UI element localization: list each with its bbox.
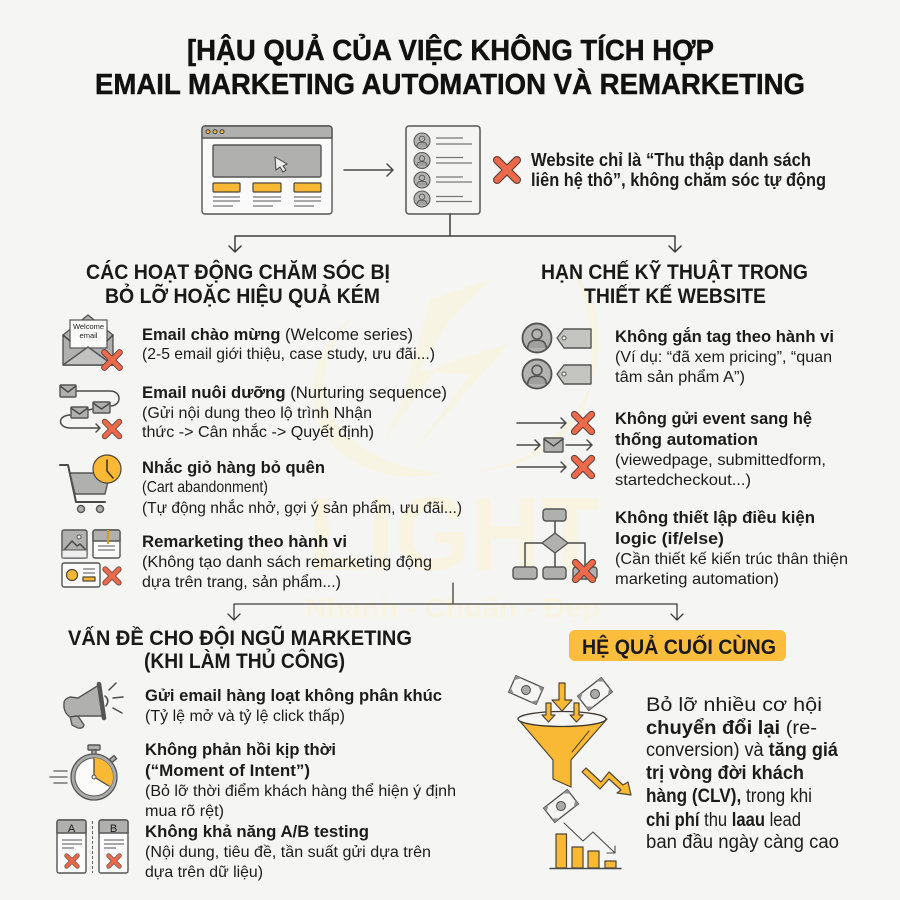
text: no events to automation <box>615 410 826 489</box>
icon: blocked events <box>517 414 592 476</box>
icon: A/B testing: B <box>110 823 117 835</box>
text: no A/B testing: Không khả năng A/B testing <box>145 823 369 841</box>
text: nurturing sequence: Email nuôi dưỡng (Nurturing sequence) <box>142 384 447 402</box>
text: nurturing sequence: (Gửi nội dung theo lộ trình Nhận <box>142 405 372 422</box>
icon: logic flowchart <box>513 509 597 580</box>
heading: technical limitations: HẠN CHẾ KỸ THUẬT TRONG <box>541 260 808 284</box>
icon: stopwatch <box>50 745 117 800</box>
text: no A/B testing <box>145 823 431 881</box>
title: [HẬU QUẢ CỦA VIỆC KHÔNG TÍCH HỢP <box>187 33 714 67</box>
text: no events to automation: Không gửi event sang hệ <box>615 410 812 428</box>
icon: welcome email: Welcome <box>73 322 104 331</box>
text: cart abandonment <box>142 458 462 517</box>
text: no events to automation: thống automation <box>615 431 758 449</box>
callout: website only collects contacts: Website chỉ là “Thu thập danh sách <box>531 150 811 170</box>
icon: megaphone <box>64 683 123 728</box>
text: no if/else logic <box>615 509 848 588</box>
callout: website only collects contacts <box>531 150 826 190</box>
icon: contact list <box>406 126 480 214</box>
text: welcome email: Email chào mừng (Welcome series) <box>142 326 413 344</box>
icon: A/B testing: A <box>68 823 76 835</box>
text: welcome email <box>142 326 435 363</box>
icon: nurturing sequence <box>60 385 119 436</box>
text: welcome email: (2-5 email giới thiệu, case study, ưu đãi...) <box>142 346 435 363</box>
text: final consequence paragraph: trị vòng đời khách <box>646 763 804 784</box>
heading: marketing team problems: (KHI LÀM THỦ CÔNG) <box>144 649 345 673</box>
text: no A/B testing: dựa trên dữ liệu) <box>145 864 263 881</box>
text: no if/else logic: marketing automation) <box>615 571 779 588</box>
text: unsegmented bulk email: (Tỷ lệ mở và tỷ lệ click thấp) <box>145 708 345 725</box>
arrow: lower connector <box>228 583 683 620</box>
text: final consequence paragraph: Bỏ lỡ nhiều cơ hội <box>646 695 822 716</box>
text: no timely response <box>145 741 456 820</box>
text: no timely response: Không phản hồi kịp thời <box>145 741 336 759</box>
icon: conversion funnel <box>509 676 631 868</box>
text: no behaviour tags: Không gắn tag theo hành vi <box>615 327 834 346</box>
text: no timely response: mua rõ rệt) <box>145 803 224 820</box>
text: behaviour remarketing: Remarketing theo hành vi <box>142 533 347 551</box>
heading: missed nurturing activities <box>86 260 390 308</box>
heading: technical limitations: THIẾT KẾ WEBSITE <box>584 285 766 308</box>
text: no events to automation: (viewedpage, submittedform, <box>615 452 826 469</box>
watermark logo: LIGHT <box>308 476 600 593</box>
icon: abandoned cart <box>60 455 121 512</box>
text: behaviour remarketing <box>142 533 432 591</box>
heading: missed nurturing activities: BỎ LỠ HOẶC HIỆU QUẢ KÉM <box>105 284 380 308</box>
icon: A/B testing <box>57 820 128 873</box>
arrow: top connector <box>229 214 681 252</box>
text: unsegmented bulk email <box>145 687 442 725</box>
arrow: website to list <box>344 164 393 176</box>
heading: missed nurturing activities: CÁC HOẠT ĐỘNG CHĂM SÓC BỊ <box>86 260 390 284</box>
text: no A/B testing: (Nội dung, tiêu đề, tần suất gửi dựa trên <box>145 844 431 861</box>
text: final consequence paragraph: conversion) và tăng giá <box>646 740 838 761</box>
text: cart abandonment: (Tự động nhắc nhở, gợi ý sản phẩm, ưu đãi...) <box>142 498 462 517</box>
icon: behaviour remarketing <box>62 530 120 587</box>
text: final consequence paragraph <box>646 695 839 853</box>
text: unsegmented bulk email: Gửi email hàng loạt không phân khúc <box>145 687 442 705</box>
text: behaviour remarketing: dựa trên trang, sản phẩm...) <box>142 573 341 591</box>
text: final consequence paragraph: hàng (CLV), trong khi <box>646 786 812 807</box>
heading: marketing team problems: VẤN ĐỀ CHO ĐỘI NGŨ MARKETING <box>68 626 412 650</box>
text: cart abandonment: Nhắc giỏ hàng bỏ quên <box>142 458 325 477</box>
text: final consequence paragraph: ban đầu ngày càng cao <box>646 832 839 853</box>
icon: red cross <box>497 160 517 180</box>
heading badge: final consequence <box>569 630 786 661</box>
heading: marketing team problems <box>68 626 412 673</box>
text: cart abandonment: (Cart abandonment) <box>142 479 268 496</box>
text: no behaviour tags <box>615 327 834 386</box>
text: no if/else logic: Không thiết lập điều kiện <box>615 509 815 527</box>
text: no if/else logic: (Cần thiết kế kiến trúc thân thiện <box>615 551 848 568</box>
icon: welcome email: email <box>80 331 98 340</box>
text: no timely response: (Bỏ lỡ thời điểm khách hàng thể hiện ý định <box>145 782 456 800</box>
text: final consequence paragraph: chi phí thu laau lead <box>646 810 801 831</box>
text: no behaviour tags: tâm sản phẩm A”) <box>615 368 745 386</box>
title <box>95 33 805 101</box>
watermark logo: Nhanh - Chuẩn - Đẹp <box>305 593 600 623</box>
text: nurturing sequence: thức -> Cân nhắc -> Quyết định) <box>142 422 374 441</box>
text: final consequence paragraph: chuyển đổi lại (re- <box>646 718 817 739</box>
callout: website only collects contacts: liên hệ thô”, không chăm sóc tự động <box>531 170 826 190</box>
text: no timely response: (“Moment of Intent”) <box>145 762 310 780</box>
heading badge: final consequence: HỆ QUẢ CUỐI CÙNG <box>582 635 776 659</box>
text: no behaviour tags: (Ví dụ: “đã xem pricing”, “quan <box>615 349 832 366</box>
icon: user tags <box>522 324 591 388</box>
text: nurturing sequence <box>142 384 447 441</box>
icon: website browser window <box>202 126 332 214</box>
icon: welcome email <box>63 315 120 368</box>
watermark logo <box>305 270 600 623</box>
text: no if/else logic: logic (if/else) <box>615 530 724 548</box>
title: EMAIL MARKETING AUTOMATION VÀ REMARKETING <box>95 67 805 101</box>
heading: technical limitations <box>541 260 808 308</box>
text: behaviour remarketing: (Không tạo danh sách remarketing động <box>142 554 432 571</box>
text: no events to automation: startedcheckout...) <box>615 472 751 489</box>
